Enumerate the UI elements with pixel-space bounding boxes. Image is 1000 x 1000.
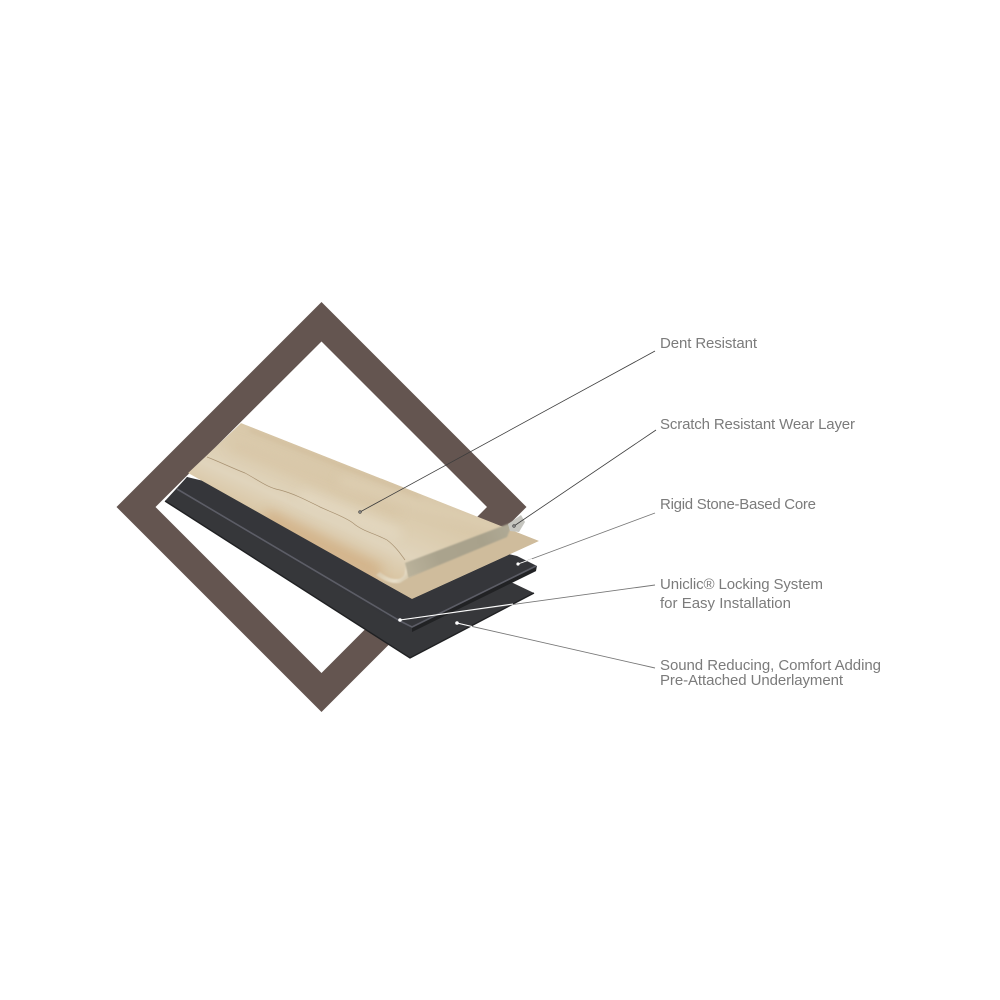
layer: wood surface: [188, 423, 539, 599]
wear layer corner curl: [508, 515, 525, 532]
label: rigid stone-based core: Rigid Stone-Based Core: [660, 496, 816, 513]
label: uniclic locking system: for Easy Installation: [660, 595, 791, 612]
label: scratch resistant wear layer: Scratch Resistant Wear Layer: [660, 416, 855, 433]
peeled wear layer band: [405, 522, 513, 578]
diamond frame: [116, 302, 526, 712]
leader: underlayment: [455, 621, 655, 668]
flat wood beyond the peel: [378, 524, 539, 599]
leader: core: [516, 513, 655, 566]
wood crack grain: [207, 457, 405, 560]
label: underlayment: Sound Reducing, Comfort Adding: [660, 657, 881, 674]
label: underlayment: Pre-Attached Underlayment: [660, 672, 844, 689]
label: uniclic locking system: [660, 576, 823, 612]
leader: dent resistant: [359, 351, 655, 513]
layer: rigid core: [177, 477, 537, 632]
label: dent resistant: Dent Resistant: [660, 335, 758, 352]
leader lines: [359, 351, 656, 668]
label: underlayment: [660, 657, 881, 689]
peel curl: [376, 563, 408, 583]
plank layers: [165, 423, 539, 658]
label: uniclic locking system: Uniclic® Locking System: [660, 576, 823, 593]
leader: locking system: [398, 585, 655, 622]
leader: wear layer: [513, 430, 656, 527]
layer: underlayment: [165, 477, 534, 658]
